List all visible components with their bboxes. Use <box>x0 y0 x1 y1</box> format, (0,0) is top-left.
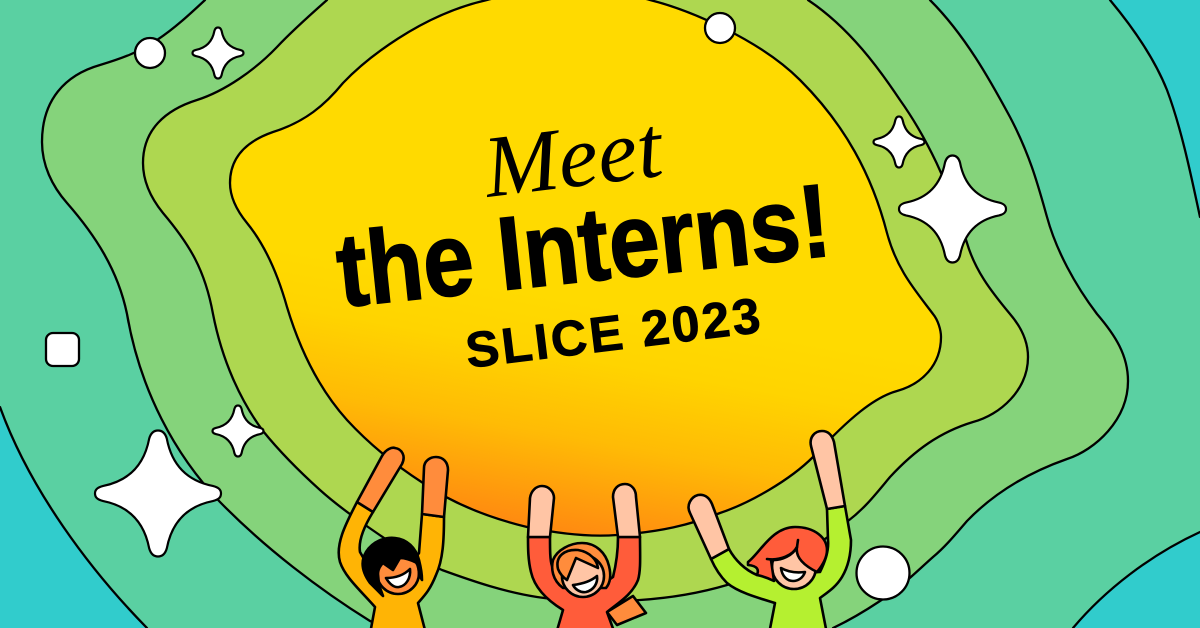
person: intern in yellow <box>339 448 448 628</box>
sparkle: lower left large <box>95 430 221 556</box>
red hair <box>748 527 827 581</box>
left forearm <box>528 486 554 537</box>
smile <box>781 568 805 581</box>
orange hair back <box>552 543 610 588</box>
sparkle: right small <box>874 116 924 168</box>
right forearm <box>613 484 640 537</box>
face <box>772 545 816 589</box>
face <box>377 552 419 594</box>
person: intern in lime <box>689 431 851 628</box>
hair parting <box>767 540 798 559</box>
heading: the Interns!: the Interns! <box>331 163 836 330</box>
left forearm <box>357 448 404 512</box>
heading: Meet: Meet <box>477 99 670 217</box>
sparkle: lower left small <box>212 406 264 456</box>
hair fringe <box>557 550 598 580</box>
rounded square <box>46 333 79 366</box>
ring: light green wave <box>143 0 1028 602</box>
circle: top left <box>135 38 165 68</box>
lime body and sleeves <box>711 506 851 628</box>
face <box>562 555 604 597</box>
sun: yellow-orange blob <box>230 0 941 536</box>
subheading: SLICE 2023: SLICE 2023 <box>463 287 763 379</box>
red body and sleeves <box>528 537 640 628</box>
sparkle: top left <box>192 28 244 78</box>
sparkle: right large <box>899 156 1006 262</box>
left forearm <box>689 495 729 559</box>
orange hair tail <box>607 596 646 625</box>
circle: lower right <box>856 546 910 600</box>
right forearm <box>422 457 448 517</box>
circle: top centre <box>705 13 735 43</box>
right forearm <box>811 431 845 509</box>
yellow body and sleeves <box>339 502 444 628</box>
person: intern in red <box>528 484 646 628</box>
black hair <box>363 538 422 596</box>
smile <box>386 569 410 587</box>
smile <box>573 576 597 592</box>
